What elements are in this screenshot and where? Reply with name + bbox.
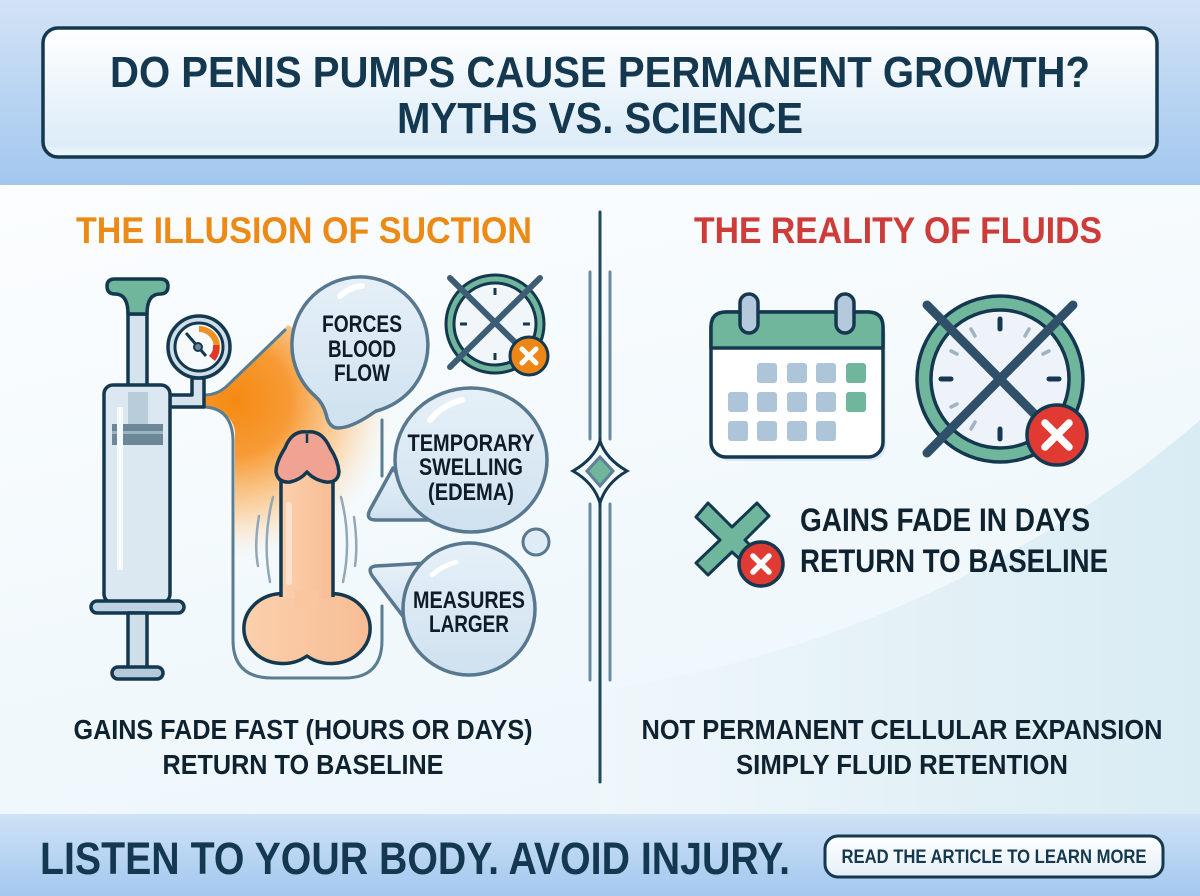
title box <box>43 28 1157 157</box>
icon: calendar <box>711 294 886 461</box>
text: gains fade in days: GAINS FADE IN DAYS <box>800 502 1090 538</box>
callout: temporary swelling: (EDEMA) <box>428 479 514 506</box>
icon: green x with red badge <box>696 503 783 586</box>
button: read the article <box>825 836 1163 877</box>
title: DO PENIS PUMPS CAUSE PERMANENT GROWTH? <box>110 48 1090 97</box>
text: gains fade in days <box>800 502 1108 579</box>
callout: forces blood flow: FORCES <box>322 311 402 338</box>
callout: temporary swelling <box>368 388 547 532</box>
callout: forces blood flow: BLOOD <box>328 336 396 363</box>
callout: forces blood flow <box>292 277 428 428</box>
callout: temporary swelling: TEMPORARY <box>408 430 534 457</box>
decorative bubble <box>523 529 549 555</box>
icon: syringe pump <box>91 279 204 679</box>
icon: pump chamber outline <box>204 330 382 678</box>
callout: temporary swelling: SWELLING <box>419 454 523 481</box>
title <box>110 48 1090 143</box>
caption: not permanent cellular expansion: SIMPLY FLUID RETENTION <box>736 749 1068 780</box>
callout: measures larger: LARGER <box>429 611 509 638</box>
icon: large crossed clock <box>917 296 1087 465</box>
caption: gains fade fast: RETURN TO BASELINE <box>162 749 444 780</box>
footer band <box>0 814 1200 896</box>
footer message: LISTEN TO YOUR BODY. AVOID INJURY. <box>40 833 790 884</box>
caption: not permanent cellular expansion <box>642 714 1162 780</box>
title: MYTHS VS. SCIENCE <box>397 94 803 143</box>
icon: anatomical illustration with motion lines <box>244 432 370 664</box>
caption: not permanent cellular expansion: NOT PERMANENT CELLULAR EXPANSION <box>642 714 1162 745</box>
caption: gains fade fast: GAINS FADE FAST (HOURS OR DAYS) <box>74 714 532 745</box>
orange suction glow <box>204 325 400 560</box>
heading: the reality of fluids: THE REALITY OF FLUIDS <box>694 210 1102 251</box>
button: read the article: READ THE ARTICLE TO LEARN MORE <box>842 847 1146 868</box>
callout: forces blood flow: FLOW <box>334 360 390 387</box>
center divider <box>573 212 627 782</box>
icon: small crossed clock <box>446 275 548 375</box>
caption: gains fade fast <box>74 714 532 780</box>
text: gains fade in days: RETURN TO BASELINE <box>800 543 1108 579</box>
heading: the illusion of suction: THE ILLUSION OF SUCTION <box>76 210 532 251</box>
icon: pressure gauge <box>168 316 230 378</box>
callout: measures larger <box>370 543 535 675</box>
callout: measures larger: MEASURES <box>413 587 525 614</box>
